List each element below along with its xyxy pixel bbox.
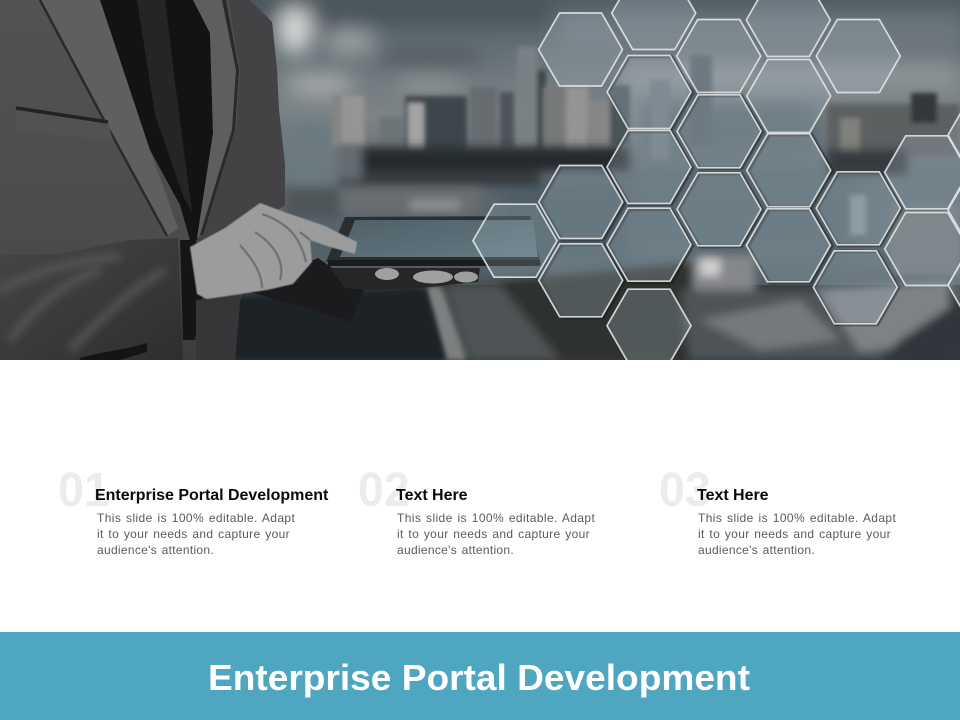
hexagon cell — [746, 209, 830, 282]
hexagon cell — [885, 212, 960, 286]
hexagon cell — [948, 174, 960, 246]
hexagon cell — [612, 0, 696, 50]
body text — [397, 511, 595, 557]
hexagon cell — [538, 13, 622, 86]
panel: hero photo of businessman with tablet and hexagon overlay — [0, 0, 960, 360]
item 03 — [659, 464, 896, 557]
hexagon cell — [607, 289, 691, 362]
body text: This slide is 100% editable. Adapt — [397, 511, 595, 525]
hexagon cell — [607, 208, 691, 281]
number 03: 03 — [659, 464, 711, 517]
hexagon cell — [948, 248, 960, 322]
shirt cuff — [180, 240, 203, 340]
jacket body — [0, 0, 285, 360]
body text: This slide is 100% editable. Adapt — [97, 511, 295, 525]
body text — [97, 511, 295, 557]
heading: Enterprise Portal Development — [95, 487, 328, 504]
body text: it to your needs and capture your — [97, 527, 290, 541]
item 01 — [58, 464, 328, 557]
lapel stitch lines — [40, 0, 167, 236]
hexagon cell — [816, 20, 900, 92]
background: blurred city — [0, 0, 960, 360]
item 02 — [358, 464, 595, 557]
hexagon cell — [677, 95, 761, 168]
title: Enterprise Portal Development — [208, 657, 750, 698]
hexagon cell — [677, 20, 761, 92]
hexagon cell — [813, 251, 897, 324]
body text: it to your needs and capture your — [397, 527, 590, 541]
title bar — [0, 632, 960, 720]
right lapel — [193, 0, 236, 238]
hexagon over tablet — [473, 204, 557, 277]
businessman in grey suit — [0, 0, 364, 360]
body text: audience's attention. — [97, 543, 214, 557]
number 01: 01 — [58, 464, 110, 517]
number 02: 02 — [358, 464, 410, 517]
right jacket panel — [196, 0, 285, 360]
dark forearm sleeve — [243, 258, 364, 322]
heading: Text Here — [697, 487, 769, 504]
hexagon cell — [747, 60, 831, 132]
body text: audience's attention. — [698, 543, 815, 557]
hexagon cell — [746, 0, 830, 56]
body text: audience's attention. — [397, 543, 514, 557]
tablet — [326, 216, 541, 266]
holding hand — [330, 268, 480, 290]
hands — [190, 203, 480, 299]
hexagon cell — [539, 166, 623, 238]
hexagon cell — [747, 134, 831, 207]
left lapel — [40, 0, 178, 236]
hexagon grid overlay — [538, 0, 960, 362]
hexagon cell — [607, 130, 691, 204]
body text — [698, 511, 896, 557]
body text: it to your needs and capture your — [698, 527, 891, 541]
hexagon cell — [539, 244, 623, 317]
hexagon cell — [677, 173, 761, 246]
hexagon cell — [816, 172, 900, 245]
breast pocket — [16, 108, 113, 141]
jacket buttons — [80, 343, 147, 360]
shirt and tie — [100, 0, 213, 240]
heading: Text Here — [396, 487, 468, 504]
hexagon cell — [885, 136, 960, 209]
hexagon cell — [607, 56, 691, 128]
pointing hand — [190, 203, 357, 299]
hexagon cell — [948, 98, 960, 172]
left sleeve — [0, 238, 183, 360]
body text: This slide is 100% editable. Adapt — [698, 511, 896, 525]
dark water beneath the man — [232, 288, 462, 360]
